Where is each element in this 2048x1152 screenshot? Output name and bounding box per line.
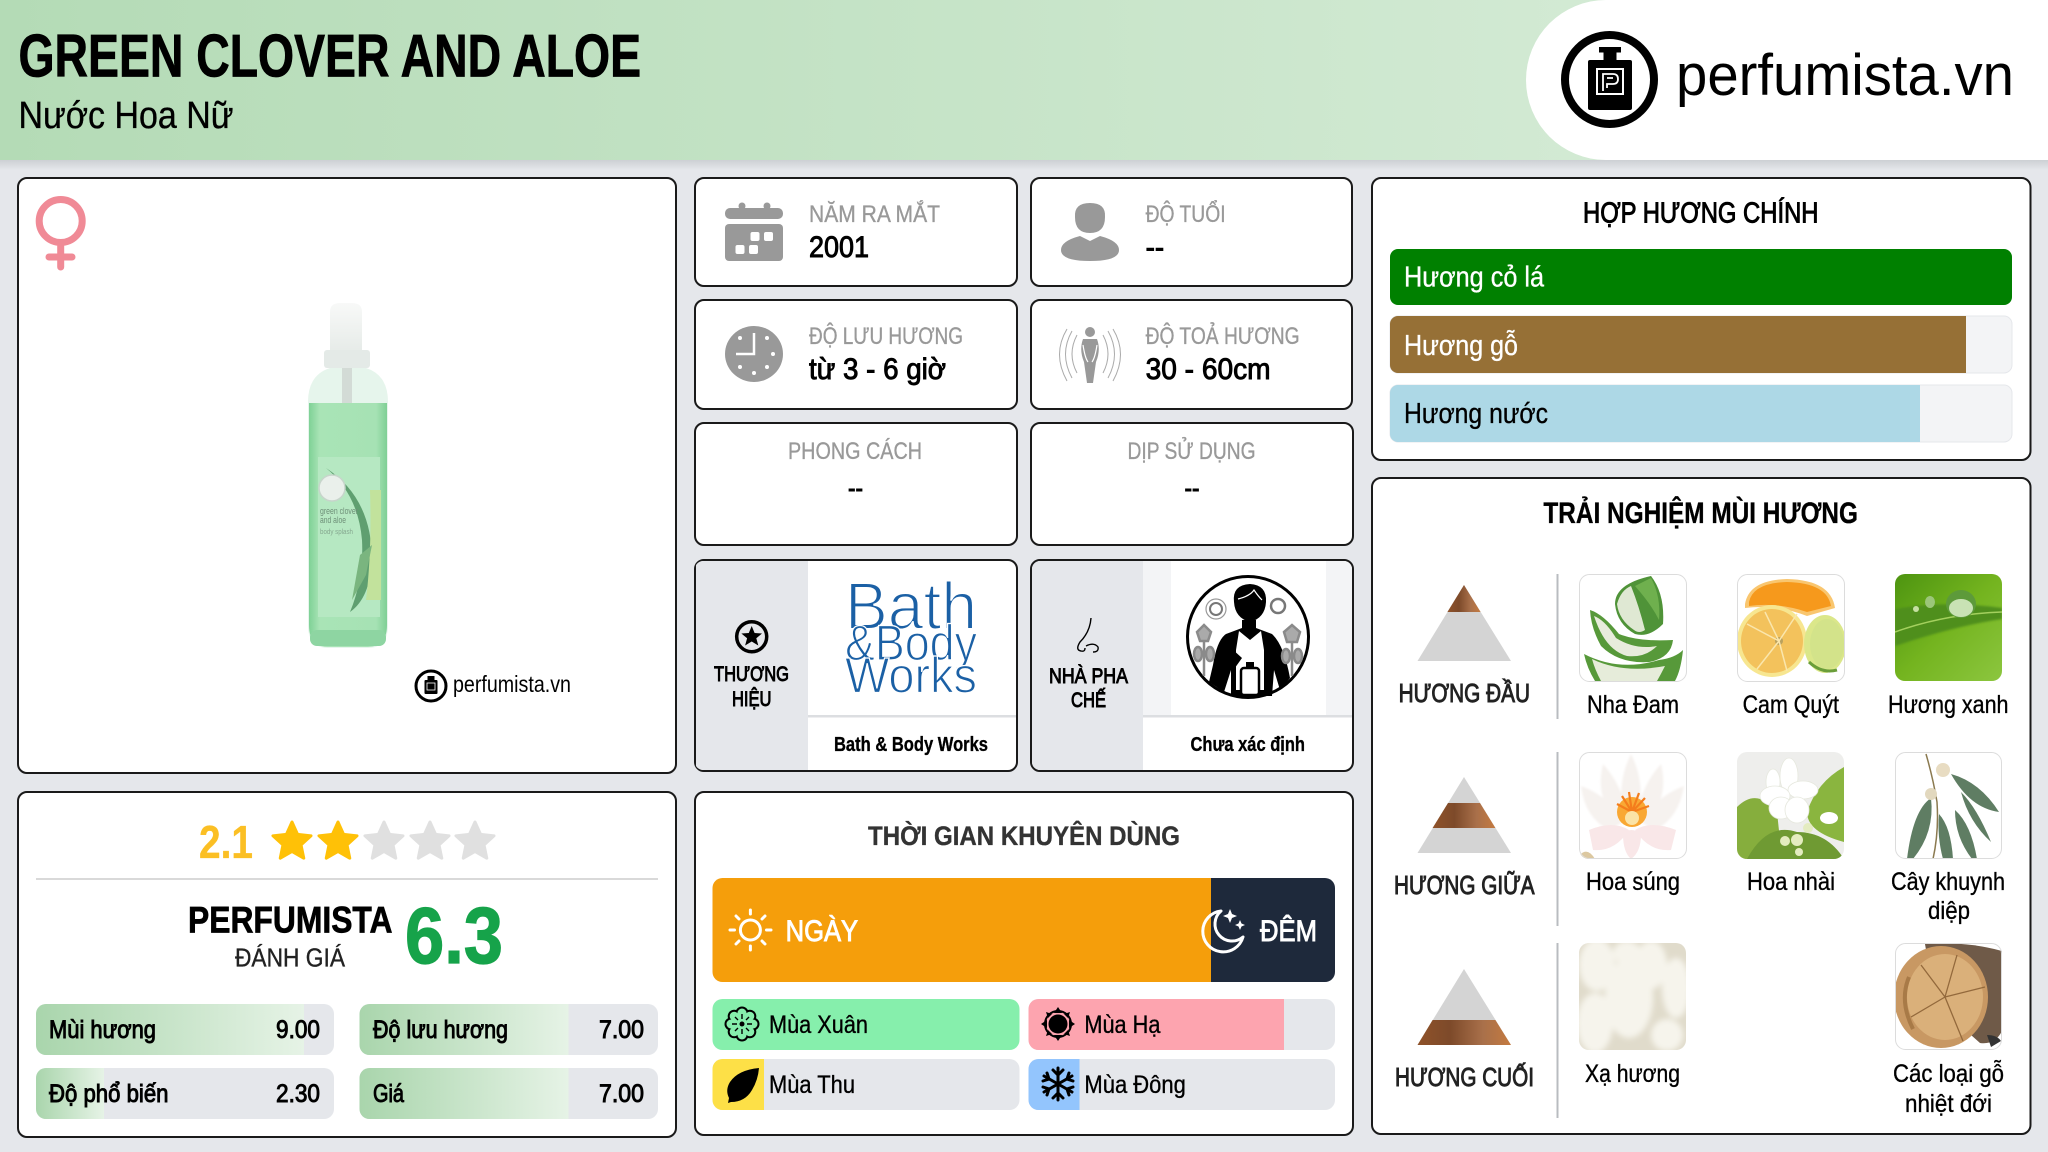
- title: GREEN CLOVER AND ALOE: [18, 22, 641, 90]
- panel: main accords: [1372, 178, 2030, 460]
- score bar: scent: [36, 1004, 334, 1055]
- card: brand: [695, 560, 1017, 771]
- card: perfumer: CHẾ: [1071, 689, 1106, 712]
- card: occasion: DỊP SỬ DỤNG: [1128, 436, 1256, 465]
- note: jasmine: [1737, 752, 1844, 896]
- note: citrus: Cam Quýt: [1743, 691, 1839, 719]
- panel: recommended time: [695, 792, 1353, 1135]
- middle notes pyramid: HƯƠNG GIỮA: [1394, 870, 1535, 900]
- card: perfumer: Chưa xác định: [1190, 734, 1305, 756]
- score bar: longevity: 7.00: [599, 1016, 644, 1044]
- perfumista sub heading: ĐÁNH GIÁ: [235, 943, 346, 973]
- brand logo: Bath & Body Works: Works: [845, 648, 977, 704]
- card: release year: [695, 178, 1017, 286]
- card: style: [695, 423, 1017, 545]
- accord bar: aquatic: [1390, 385, 2012, 442]
- product bottle: [308, 303, 388, 648]
- score bar: price: Giá: [373, 1080, 404, 1108]
- card: release year: NĂM RA MẮT: [809, 200, 940, 228]
- perfumista heading: PERFUMISTA: [188, 900, 392, 941]
- card: style: --: [848, 473, 863, 503]
- note: green: Hương xanh: [1888, 691, 2008, 719]
- note: eucalyptus: [1891, 752, 2005, 925]
- panel: ratings: [18, 792, 676, 1137]
- note: musk: Xạ hương: [1585, 1060, 1680, 1088]
- brand logo: Bath & Body Works: [845, 569, 977, 704]
- season: winter: [1028, 1059, 1335, 1110]
- card: projection: [1031, 300, 1352, 409]
- score bar: scent: 9.00: [276, 1016, 320, 1044]
- top notes pyramid: [1399, 585, 1530, 708]
- card: age: --: [1146, 231, 1164, 264]
- note: tropical woods: [1893, 943, 2004, 1118]
- note: musk: [1577, 939, 1690, 1088]
- perfumista score: 6.3: [405, 891, 503, 980]
- card: age: [1031, 178, 1352, 286]
- card: projection: 30 - 60cm: [1146, 353, 1271, 386]
- header band: [0, 0, 2048, 160]
- icon: flower: [724, 1006, 760, 1042]
- score bar: longevity: Độ lưu hương: [373, 1016, 508, 1044]
- star rating: [273, 822, 494, 858]
- heading: THỜI GIAN KHUYÊN DÙNG: [868, 820, 1180, 851]
- watermark logo: perfumista.vn: [453, 671, 571, 697]
- card: age: ĐỘ TUỔI: [1146, 200, 1226, 228]
- score bar: price: [360, 1068, 658, 1119]
- card: longevity: [695, 300, 1017, 409]
- icon: leaf: [727, 1068, 759, 1103]
- icon: person: [1061, 203, 1119, 261]
- icon: scent radiating from person: [1060, 327, 1120, 383]
- card: perfumer: NHÀ PHA: [1049, 665, 1128, 688]
- icon: female symbol: [39, 200, 82, 267]
- card: brand: Bath & Body Works: [834, 734, 988, 756]
- season: summer: [1028, 999, 1335, 1050]
- card: occasion: [1031, 423, 1353, 545]
- score bar: price: 7.00: [599, 1080, 644, 1108]
- middle notes pyramid: [1394, 777, 1535, 900]
- score bar: scent: Mùi hương: [49, 1016, 156, 1044]
- icon: moon: [1203, 909, 1245, 952]
- card: perfumer: [1031, 560, 1353, 771]
- brand logo: Bath & Body Works: &Body: [845, 615, 977, 671]
- score bar: longevity: [360, 1004, 658, 1055]
- note: jasmine: Hoa nhài: [1747, 868, 1835, 896]
- note: eucalyptus: diệp: [1928, 897, 1970, 925]
- panel: product photo: [18, 178, 676, 773]
- heading: HỢP HƯƠNG CHÍNH: [1583, 197, 1818, 230]
- note: citrus: [1737, 574, 1846, 719]
- watermark logo: [416, 671, 571, 701]
- icon: nose: [1078, 618, 1098, 652]
- brand logo: Bath & Body Works: Bath: [845, 569, 977, 644]
- subtitle: Nước Hoa Nữ: [18, 95, 234, 137]
- accord bar: woody: Hương gỗ: [1404, 329, 1518, 362]
- product bottle: green clover: [320, 506, 358, 516]
- season: winter: Mùa Đông: [1084, 1071, 1186, 1099]
- accord bar: green: [1390, 249, 2012, 305]
- card: longevity: từ 3 - 6 giờ: [809, 353, 946, 386]
- note: tropical woods: nhiệt đới: [1905, 1090, 1992, 1118]
- card: brand: HIỆU: [732, 688, 772, 711]
- accord bar: aquatic: Hương nước: [1404, 398, 1548, 430]
- icon: snowflake: [1043, 1068, 1073, 1100]
- brand logo: perfumista.vn: perfumista.vn: [1676, 43, 2014, 108]
- accord bar: woody: [1390, 316, 2012, 373]
- season: spring: [712, 999, 1020, 1050]
- panel: scent experience: [1372, 478, 2030, 1134]
- product bottle: and aloe: [320, 515, 346, 525]
- note: water lily: Hoa súng: [1586, 868, 1680, 896]
- season: summer: Mùa Hạ: [1084, 1011, 1160, 1039]
- heading: TRẢI NGHIỆM MÙI HƯƠNG: [1543, 496, 1858, 530]
- score bar: popularity: Độ phổ biến: [49, 1080, 168, 1108]
- brand logo: perfumista.vn: [1526, 0, 2048, 160]
- season: spring: Mùa Xuân: [769, 1011, 868, 1039]
- product bottle: body splash: [320, 529, 353, 536]
- day and night bar: ĐÊM: [1260, 915, 1317, 948]
- card: occasion: --: [1184, 473, 1200, 503]
- accord bar: green: Hương cỏ lá: [1404, 262, 1545, 294]
- illustration: perfumer portrait: [1188, 576, 1308, 698]
- season: autumn: [712, 1059, 1020, 1110]
- base notes pyramid: [1395, 969, 1534, 1092]
- top notes pyramid: HƯƠNG ĐẦU: [1399, 678, 1530, 708]
- note: aloe: Nha Đam: [1587, 691, 1679, 719]
- card: longevity: ĐỘ LƯU HƯƠNG: [809, 322, 963, 350]
- season: autumn: Mùa Thu: [769, 1071, 855, 1099]
- day and night bar: [712, 878, 1335, 982]
- icon: sun: [1041, 1007, 1075, 1041]
- icon: clock: [725, 326, 783, 382]
- note: tropical woods: Các loại gỗ: [1893, 1059, 2004, 1088]
- note: green: [1888, 574, 2008, 719]
- icon: star badge: [737, 622, 767, 652]
- card: release year: 2001: [809, 231, 869, 264]
- icon: calendar: [725, 202, 783, 261]
- day and night bar: NGÀY: [786, 915, 858, 948]
- user rating score: 2.1: [199, 816, 253, 868]
- note: eucalyptus: Cây khuynh: [1891, 868, 2005, 896]
- icon: sun: [730, 910, 771, 950]
- note: water lily: [1579, 752, 1686, 896]
- score bar: popularity: [36, 1068, 334, 1119]
- card: brand: THƯƠNG: [714, 663, 789, 686]
- note: aloe: [1579, 574, 1686, 719]
- card: style: PHONG CÁCH: [788, 438, 922, 465]
- card: projection: ĐỘ TOẢ HƯƠNG: [1146, 321, 1300, 350]
- base notes pyramid: HƯƠNG CUỐI: [1395, 1062, 1534, 1092]
- score bar: popularity: 2.30: [276, 1080, 320, 1108]
